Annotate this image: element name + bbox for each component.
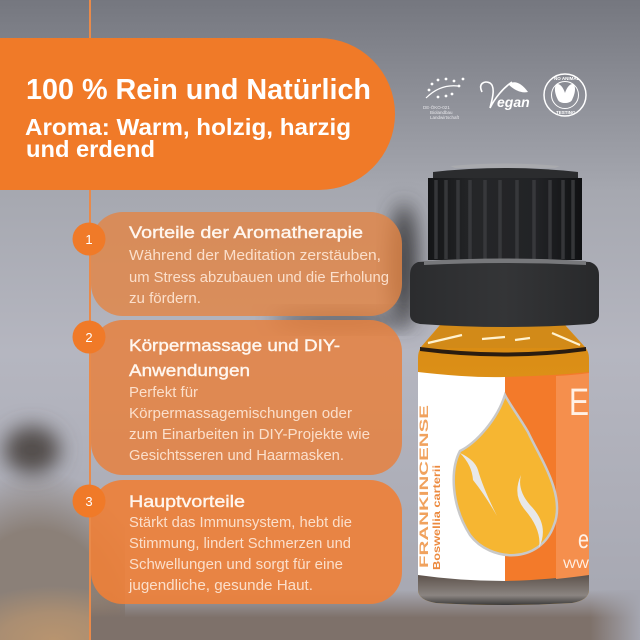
body: Schwellungen und sorgt für eine [129, 556, 343, 573]
body: Stärkt das Immunsystem, hebt die [129, 514, 352, 531]
badge 3: 3 [85, 494, 93, 509]
heading [129, 336, 340, 380]
bottle glass [418, 325, 589, 605]
certification logos [423, 74, 586, 120]
title: 100 % Rein und Natürlich [26, 74, 371, 106]
panel: benefit 1 [72, 212, 402, 316]
body: Stimmung, lindert Schmerzen und [129, 535, 351, 552]
body [128, 514, 352, 594]
heading: Vorteile der Aromatherapie [129, 223, 363, 242]
body: Körpermassagemischungen oder [129, 405, 352, 422]
bottle [410, 164, 599, 605]
badge 2: 2 [85, 330, 93, 345]
icon: no animal testing stamp: TESTING [556, 110, 576, 115]
body [129, 247, 389, 307]
icon: no animal testing stamp: NO ANIMAL [554, 76, 580, 81]
droplet [454, 395, 557, 555]
heading: Hauptvorteile [129, 492, 245, 511]
panel: benefit 3 [72, 480, 402, 604]
collar [410, 259, 599, 327]
panel: benefit 2 [72, 320, 402, 475]
cap [410, 164, 599, 327]
subtitle [25, 114, 351, 162]
badge 3 [72, 484, 106, 518]
badge 2 [72, 320, 106, 354]
body: Gesichtsseren und Haarmasken. [129, 447, 344, 464]
body [129, 384, 370, 464]
icon: EU organic leaf: Landwirtschaft [430, 115, 460, 120]
body: um Stress abzubauen und die Erholung [129, 269, 389, 286]
label [418, 372, 505, 581]
icon: EU organic leaf: Biolandbau [430, 110, 453, 115]
body: zum Einarbeiten in DIY-Projekte wie [129, 426, 370, 443]
body: Während der Meditation zerstäuben, [129, 247, 381, 264]
brand text [563, 382, 590, 571]
brand text: E [569, 382, 589, 424]
icon: vegan logo [481, 82, 530, 110]
brand text: WW [563, 557, 590, 571]
icon: EU organic leaf: DE-ÖKO-021 [423, 104, 450, 110]
icon: vegan logo: egan [497, 94, 530, 110]
heading: Anwendungen [129, 361, 250, 380]
timeline line [89, 0, 91, 640]
badge 1 [72, 222, 106, 256]
icon: no animal testing stamp [544, 74, 586, 116]
body: Perfekt für [129, 384, 198, 401]
latin name: Boswellia carterii [431, 465, 443, 570]
bottle base [418, 573, 589, 605]
brand text: e [578, 524, 589, 554]
header banner [0, 38, 395, 190]
subtitle: Aroma: Warm, holzig, harzig [25, 114, 351, 140]
subtitle: und erdend [26, 136, 155, 162]
badge 1: 1 [85, 232, 93, 247]
body: zu fördern. [129, 290, 201, 307]
icon: EU organic leaf [423, 78, 464, 120]
body: jugendliche, gesunde Haut. [128, 577, 313, 594]
heading: Körpermassage und DIY- [129, 336, 340, 355]
product name: FRANKINCENSE [419, 404, 431, 568]
